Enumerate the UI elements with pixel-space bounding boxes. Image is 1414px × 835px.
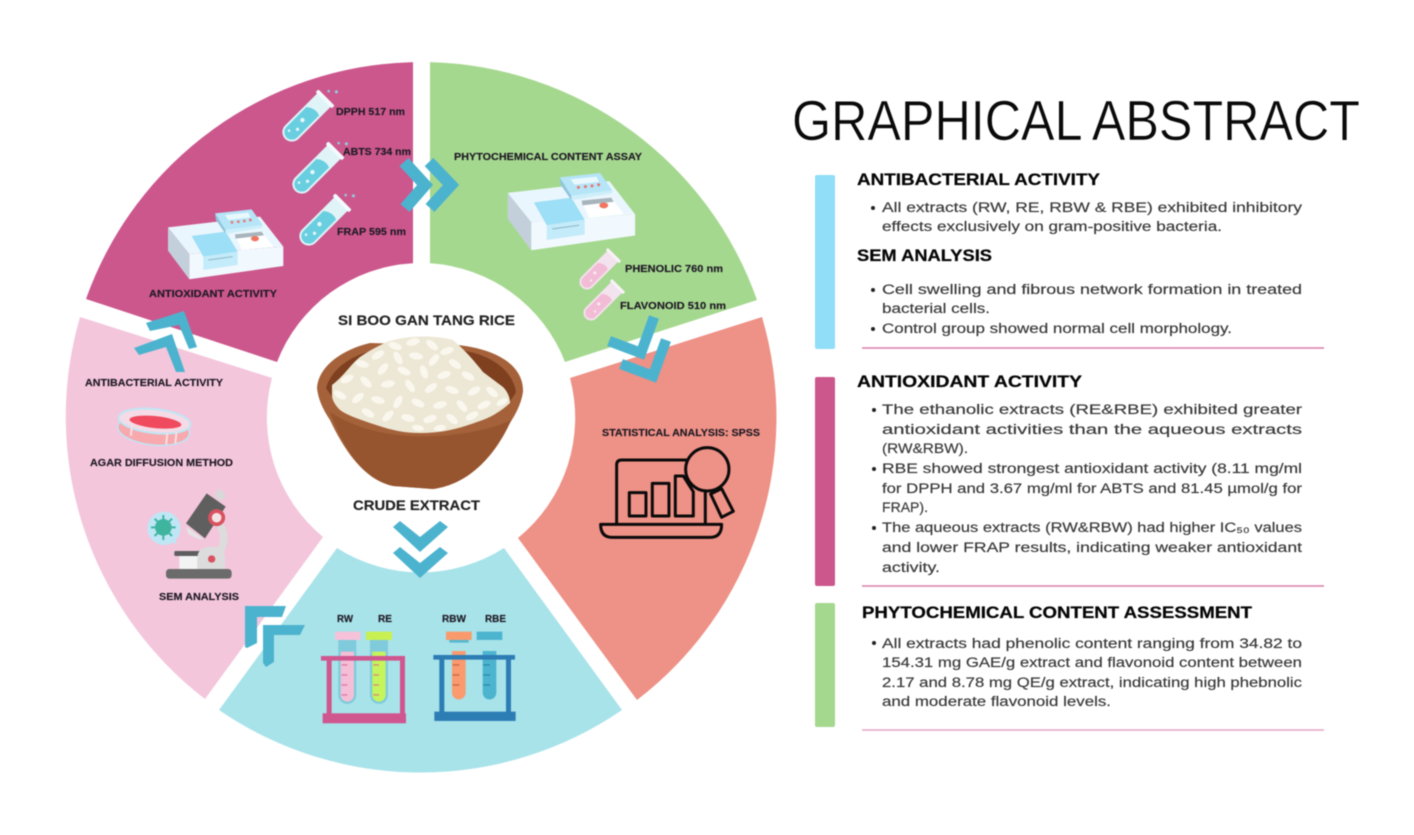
arrow: crude extract to tubes [393,521,448,578]
icon: spectrophotometer [168,209,283,279]
accent bar: magenta [815,377,835,586]
segment: antibacterial activity [66,317,323,699]
text: phytochemical bullets: 154.31 mg GAE/g extract and flavonoid content between [882,655,1302,670]
bowl body [317,343,523,489]
label: crude extract: CRUDE EXTRACT [353,497,480,513]
label: RBW: RBW [442,614,467,625]
heading: SEM analysis: SEM ANALYSIS [857,246,992,265]
accent bar: green [815,603,835,727]
bowl shading [330,412,511,489]
bowl interior [326,349,516,430]
segment: extract test tubes [219,548,622,773]
text: antioxidant bullets: and lower FRAP results, indicating weaker antioxidant [882,540,1302,555]
icon: spectrophotometer [508,173,635,250]
text: antibacterial findings [871,200,1302,234]
label: FRAP: FRAP 595 nm [337,227,406,238]
arrows: process flow chevrons [134,162,666,667]
icon: blue test tube rack [433,632,516,721]
panel: antioxidant findings [815,372,1324,586]
label: phenolic: PHENOLIC 760 nm [625,264,723,275]
text: antioxidant bullets: activity. [882,560,940,575]
segment: antioxidant activity [86,62,413,362]
text: antioxidant bullets: FRAP). [882,500,928,515]
text: SEM findings [871,282,1302,336]
icon: laptop with magnifier [601,448,733,537]
arrow: antibacterial to antioxidant [134,311,197,372]
text: phytochemical bullets [872,636,1302,709]
text: antioxidant bullets: for DPPH and 3.67 mg/ml for ABTS and 81.45 µmol/g for [882,481,1303,496]
accent bar: blue [815,175,835,349]
label: agar diffusion method: AGAR DIFFUSION METHOD [90,458,233,469]
label: si boo gan tang rice: SI BOO GAN TANG RICE [338,312,515,328]
icon: microscope [147,488,232,579]
label: DPPH: DPPH 517 nm [336,107,405,118]
center: rice bowl [317,312,523,513]
text: antioxidant bullets: (RW&RBW). [882,441,968,456]
text: antioxidant bullets: antioxidant activities than the aqueous extracts [882,422,1302,437]
icon: petri dish [116,405,192,449]
segment: statistical analysis [518,317,776,700]
text: antibacterial findings: All extracts (RW, RE, RBW & RBE) exhibited inhibitory [882,200,1302,215]
text: phytochemical bullets: All extracts had phenolic content ranging from 34.82 to [882,636,1302,651]
icon: test tube ABTS [287,133,353,199]
label: SEM analysis: SEM ANALYSIS [159,592,239,603]
text: phytochemical bullets: 2.17 and 8.78 mg QE/g extract, indicating high phebnolic [882,675,1302,690]
label: RW: RW [337,614,354,625]
label: phytochemical content assay: PHYTOCHEMICAL CONTENT ASSAY [454,152,642,163]
label: statistical analysis: STATISTICAL ANALYSIS: SPSS [602,428,760,439]
label: RBE: RBE [485,614,506,625]
text: SEM findings: Cell swelling and fibrous network formation in treated [882,282,1302,297]
heading: antioxidant activity: ANTIOXIDANT ACTIVITY [857,372,1083,391]
arrow: antioxidant to phytochemical [404,162,451,208]
text: antioxidant bullets: RBE showed strongest antioxidant activity (8.11 mg/ml [882,461,1302,476]
segment: phytochemical content assay [430,62,757,362]
panel: phytochemical findings [815,603,1324,730]
text: antibacterial findings: effects exclusively on gram-positive bacteria. [882,219,1222,234]
label: flavonoid: FLAVONOID 510 nm [620,301,726,312]
icon: test tube FRAP [294,185,360,251]
text: antioxidant bullets: The ethanolic extracts (RE&RBE) exhibited greater [882,402,1303,417]
arrow: phytochemical to statistics [609,317,666,376]
icon: test tube phenolic [575,248,621,294]
label: ABTS: ABTS 734 nm [343,147,411,158]
icon: test tube DPPH [277,81,343,147]
label: antioxidant activity: ANTIOXIDANT ACTIVITY [149,289,277,300]
label: antibacterial activity: ANTIBACTERIAL ACTIVITY [85,378,223,389]
icon: pink test tube rack [321,632,406,723]
heading: phytochemical content assessment: PHYTOCHEMICAL CONTENT ASSESSMENT [862,603,1253,622]
heading: antibacterial activity: ANTIBACTERIAL ACTIVITY [857,170,1101,189]
icon: test tube flavonoid [579,279,625,325]
label: RE: RE [378,614,392,625]
text: antioxidant bullets: The aqueous extracts (RW&RBW) had higher IC₅₀ values [882,520,1302,535]
panel: antibacterial and SEM findings [815,170,1324,349]
text: antioxidant bullets [872,402,1303,575]
text: SEM findings: Control group showed normal cell morphology. [882,321,1232,336]
rice mound [332,336,510,433]
arrow: tubes to antibacterial [245,606,305,667]
text: SEM findings: bacterial cells. [882,301,990,316]
text: phytochemical bullets: and moderate flavonoid levels. [882,694,1111,709]
